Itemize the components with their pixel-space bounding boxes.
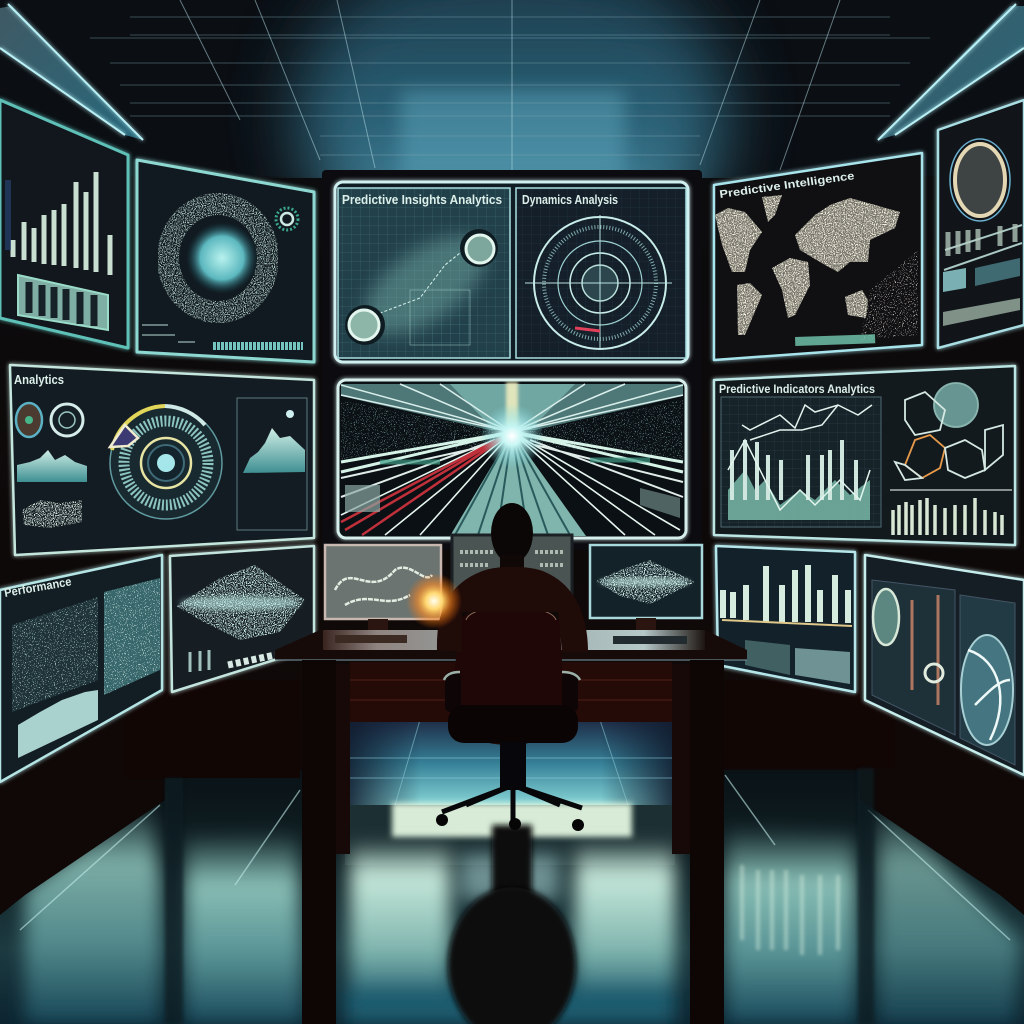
person silhouette [437, 503, 588, 652]
heading: predictive analytics: Predictive Insights Analytics [342, 193, 502, 207]
tunnel upper structure [341, 384, 683, 430]
area chart: right peak [237, 398, 307, 530]
chart: vertical bars [912, 595, 938, 705]
floor [0, 720, 1024, 1024]
speckle chart: small left [22, 500, 82, 528]
ceiling light strip: right [878, 4, 1024, 140]
tunnel city band [341, 400, 683, 460]
monitor: left desk [325, 545, 441, 631]
chart: swirl [925, 635, 1013, 745]
panel: right lower bar screen [716, 546, 855, 692]
radial wheel chart [110, 406, 222, 519]
combined line and bar chart [721, 397, 881, 527]
chart: map speckle right [104, 578, 160, 695]
panel: right middle predictive dashboard [714, 366, 1015, 545]
back wall dark frame [322, 170, 702, 550]
panel: left middle analytics dashboard [10, 365, 314, 555]
panel: left lower scatter screen [170, 546, 314, 692]
world map [715, 195, 918, 340]
panel: center tunnel screen [338, 380, 686, 538]
panel: left radial screen [137, 160, 314, 362]
area chart: bottom left [18, 690, 98, 758]
gauge: ring left [873, 589, 899, 645]
chart: scatter cloud [176, 565, 305, 640]
panel: right world map screen [714, 153, 922, 360]
hexagon network chart [895, 383, 1003, 480]
desk [275, 630, 747, 1024]
panel: far right screen [938, 100, 1024, 348]
sub-panel: dynamics radar [516, 188, 686, 358]
heading: predictive indicators analytics: Predictive Indicators Analytics [719, 384, 875, 396]
panel: left lower performance screen [0, 555, 162, 782]
office chair [436, 607, 584, 831]
chart: grid speckle left [12, 597, 98, 712]
chart strip: far left lower table [18, 275, 108, 330]
tunnel lower cyan beam [450, 432, 586, 536]
vertical light stripes in right reflection [742, 865, 838, 955]
ceiling [90, 0, 930, 178]
heading: dynamics analysis: Dynamics Analysis [522, 193, 618, 207]
chart: left radial rings [168, 204, 298, 312]
light flare at desk [406, 573, 462, 629]
side wall bases [0, 680, 1024, 1024]
heading: analytics: Analytics [14, 372, 64, 387]
monitor: right desk [590, 545, 702, 631]
heading: performance: Performance [3, 574, 73, 600]
bar chart: far left bars [13, 172, 110, 275]
bar chart: lower right [893, 498, 1002, 535]
panel: center top screen frame [335, 182, 688, 362]
panel: right lower radial screen [865, 555, 1024, 775]
ceiling light strip: left [0, 4, 143, 140]
monitor: center desk [452, 535, 572, 595]
panel: far left bar chart screen [0, 100, 128, 348]
tunnel perspective rays [341, 384, 683, 535]
gauge: far right ring [950, 139, 1010, 221]
heading: predictive intelligence: Predictive Intelligence [719, 170, 855, 201]
sub-panel: predictive analytics chart [338, 188, 510, 358]
area chart: small left [17, 450, 87, 482]
person reflection on floor [448, 825, 576, 1024]
gauges [16, 403, 83, 437]
bar chart: right lower [723, 565, 848, 623]
tiles under the desk [350, 720, 672, 805]
reflections on the floor [25, 800, 1020, 1024]
